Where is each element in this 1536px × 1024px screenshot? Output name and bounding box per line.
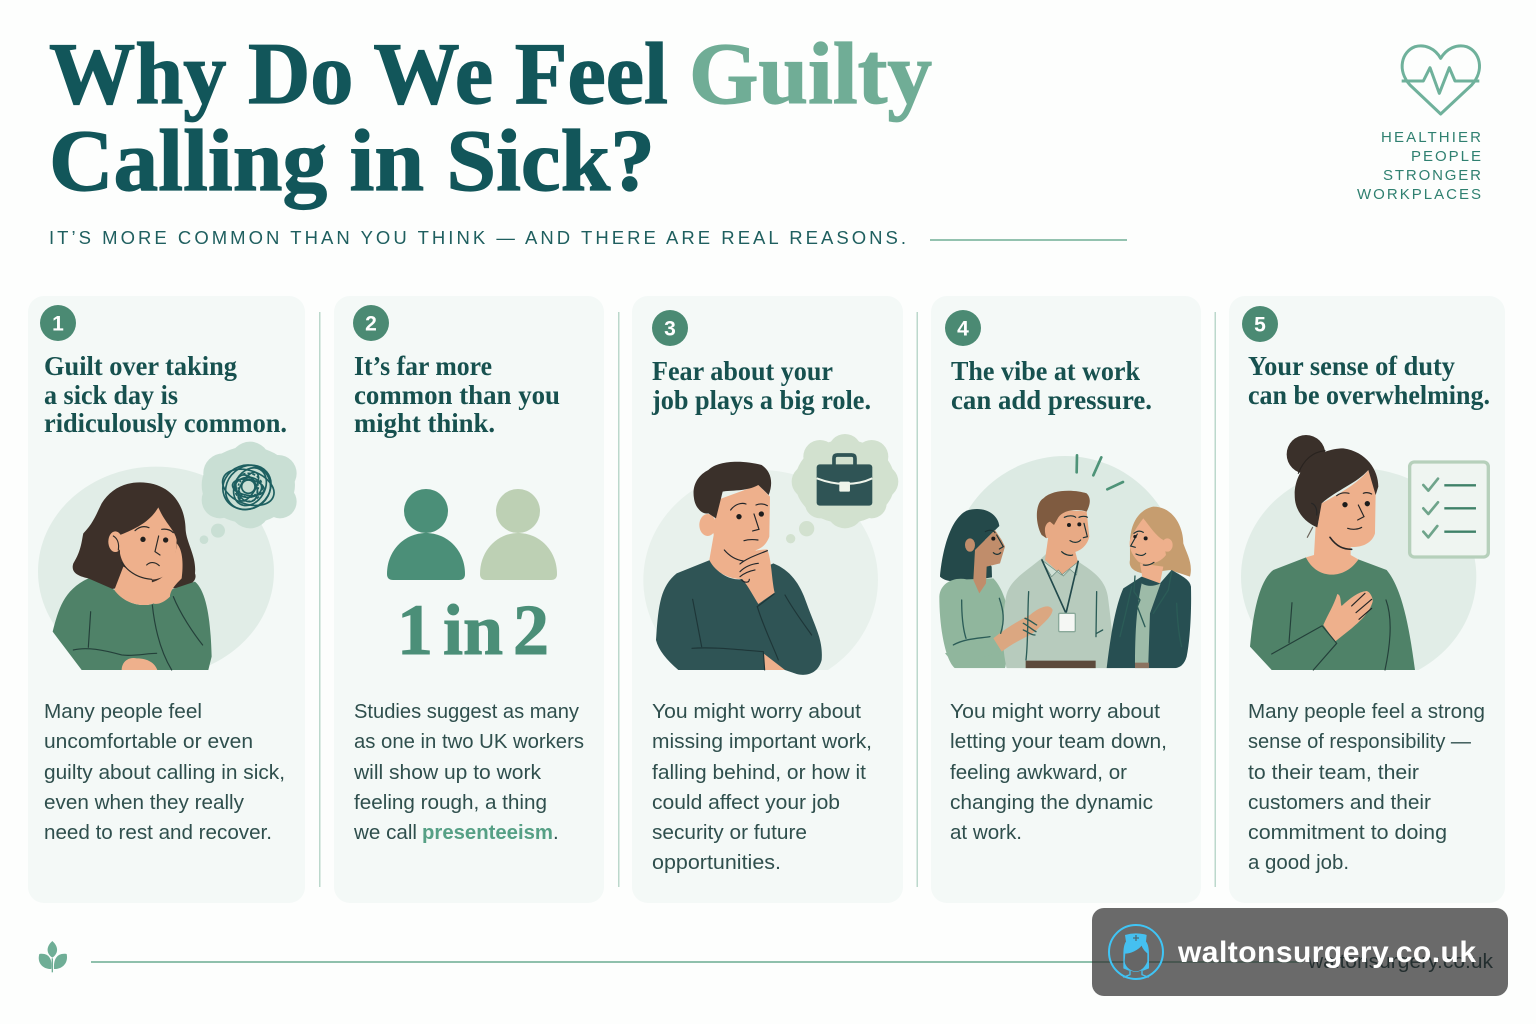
heading 2: It’s far more <box>354 350 492 381</box>
body text 5: Many people feel a strong <box>1248 700 1485 723</box>
body text 1: guilty about calling in sick, <box>44 761 285 784</box>
watermark badge <box>1092 908 1508 996</box>
heading 3: job plays a big role. <box>651 384 871 415</box>
number badge 5: 5 <box>1254 314 1266 336</box>
icon: footer leaf <box>39 941 67 972</box>
number badge 3: 3 <box>664 318 676 340</box>
body text 1 <box>44 700 285 844</box>
title: Why Do We Feel <box>49 26 668 123</box>
body text 2: as one in two UK workers <box>354 730 584 753</box>
panel: card 2 1 in 2 statistic <box>334 296 604 903</box>
body text 4: feeling awkward, or <box>950 761 1127 784</box>
footer rule <box>91 961 1303 963</box>
body text 3: falling behind, or how it <box>652 761 866 784</box>
body text 3: could affect your job <box>652 791 840 814</box>
number badge 4 <box>945 310 981 346</box>
heading 2: common than you <box>354 379 560 410</box>
heading 1: a sick day is <box>44 379 178 410</box>
illustration: worried man with briefcase thought <box>643 434 898 690</box>
icon: person highlighted <box>387 489 465 580</box>
footer url: waltonsurgery.co.uk <box>1307 951 1494 973</box>
body text 5: customers and their <box>1248 791 1431 814</box>
statistic: 1 in 2: 1 in 2 <box>397 590 549 670</box>
body text 5: a good job. <box>1248 851 1349 874</box>
body text 1: uncomfortable or even <box>44 730 253 753</box>
body text 5: sense of responsibility — <box>1248 730 1471 753</box>
watermark text: waltonsurgery.co.uk <box>1177 936 1476 969</box>
heading 4 <box>951 355 1152 415</box>
body text 4: changing the dynamic <box>950 791 1153 814</box>
illustration: woman with hand on chest and checklist <box>1241 435 1488 685</box>
body text 2: presenteeism <box>422 821 553 844</box>
tagline: WORKPLACES <box>1357 186 1481 203</box>
body text 5: commitment to doing <box>1248 821 1447 844</box>
heading 2 <box>354 350 560 438</box>
heading 4: can add pressure. <box>951 384 1152 415</box>
panel: card 5 sense of duty <box>1229 296 1505 903</box>
heading 3: Fear about your <box>652 355 833 386</box>
title: Guilty <box>689 26 932 123</box>
tagline: PEOPLE <box>1411 148 1481 165</box>
body text 2: . <box>553 821 559 844</box>
title <box>49 26 932 210</box>
heading 2: might think. <box>354 407 495 438</box>
title: Calling in Sick? <box>49 113 655 210</box>
number badge 1: 1 <box>52 312 64 336</box>
heading 1: ridiculously common. <box>44 407 287 438</box>
body text 2: will show up to work <box>353 761 542 784</box>
panel: card 3 job fear <box>632 296 903 903</box>
number badge 3 <box>652 310 688 346</box>
number badge 2 <box>353 305 389 341</box>
body text 3 <box>652 700 872 874</box>
heading 5: can be overwhelming. <box>1248 379 1490 410</box>
panel: card 4 workplace vibe <box>931 296 1201 903</box>
icon: heart <box>1402 46 1479 114</box>
logo: heart with heartbeat and tagline <box>1357 46 1481 203</box>
body text 4: You might worry about <box>950 700 1160 723</box>
heading 1: Guilt over taking <box>44 350 237 381</box>
tagline: HEALTHIER <box>1381 129 1481 146</box>
heading 5: Your sense of duty <box>1248 350 1455 381</box>
body text 3: opportunities. <box>652 851 781 874</box>
heading 1 <box>44 350 287 438</box>
body text 4: at work. <box>950 821 1022 844</box>
number badge 5 <box>1242 306 1278 342</box>
body text 2: we call <box>353 821 417 844</box>
number badge 4: 4 <box>957 318 969 340</box>
illustration: worried woman with tangled thought <box>38 442 297 677</box>
heading 3 <box>651 355 871 415</box>
subtitle: IT’S MORE COMMON THAN YOU THINK — AND THERE ARE REAL REASONS. <box>49 227 906 248</box>
tagline: STRONGER <box>1383 167 1481 184</box>
body text 5: to their team, their <box>1248 761 1419 784</box>
body text 4 <box>950 700 1167 844</box>
body text 3: security or future <box>652 821 807 844</box>
icon: person muted <box>480 489 557 580</box>
body text 2: Studies suggest as many <box>354 700 580 723</box>
illustration: three colleagues talking <box>939 455 1191 684</box>
body text 1: need to rest and recover. <box>44 821 272 844</box>
tagline <box>1357 129 1481 203</box>
body text 5 <box>1248 700 1485 874</box>
heading 5 <box>1248 350 1490 410</box>
body text 4: letting your team down, <box>950 730 1167 753</box>
number badge 2: 2 <box>365 312 377 336</box>
body text 1: even when they really <box>44 791 245 814</box>
icon: nurse <box>1109 925 1163 979</box>
number badge 1 <box>40 305 76 341</box>
panel: card 1 guilt is common <box>28 296 305 903</box>
body text 3: You might worry about <box>652 700 861 723</box>
body text 1: Many people feel <box>44 700 202 723</box>
body text 3: missing important work, <box>652 730 872 753</box>
heading 4: The vibe at work <box>951 355 1141 386</box>
body text 2: feeling rough, a thing <box>354 791 547 814</box>
body text 2 <box>353 700 584 844</box>
